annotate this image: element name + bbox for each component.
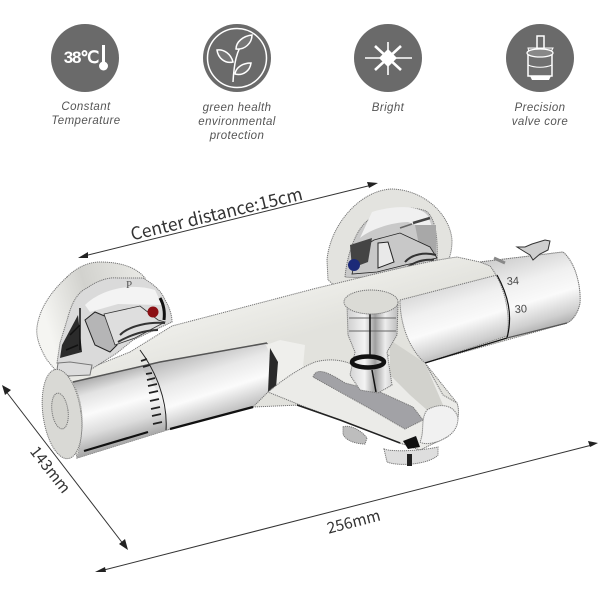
faucet <box>37 189 580 466</box>
diverter knob <box>344 290 398 393</box>
caption: valve core: valve core <box>512 116 568 128</box>
label: center distance: Center distance:15cm <box>128 181 305 246</box>
label: 256mm: 256mm <box>324 504 383 539</box>
thermostat housing right: 34 <box>506 275 519 288</box>
icon: bright star <box>354 24 422 92</box>
icon: valve core <box>506 24 574 92</box>
handle dome: left <box>57 278 172 376</box>
caption: constant temperature: Constant <box>61 101 111 113</box>
icon: green health leaf <box>203 24 271 92</box>
caption: constant temperature: Temperature <box>51 115 121 127</box>
caption: bright: Bright <box>372 102 405 114</box>
caption: green health: green health <box>203 102 271 114</box>
icon: constant temperature: 38℃ <box>64 48 99 67</box>
thermostat housing right: 30 <box>514 303 527 316</box>
back plate: left handle <box>37 262 145 378</box>
caption: green health: environmental <box>198 116 276 128</box>
handle dome: right <box>345 207 437 277</box>
arrow: width 256mm <box>95 441 598 572</box>
end cap of left thermostat <box>37 367 87 461</box>
handle dome: left: P <box>126 279 132 291</box>
main body silhouette <box>60 252 580 458</box>
aerator nut <box>343 426 438 466</box>
label: 143mm: 143mm <box>25 441 76 498</box>
back plate: right handle <box>327 189 452 290</box>
arrow: height 143mm <box>2 385 128 550</box>
icon: constant temperature <box>51 24 119 92</box>
caption: green health: protection <box>209 130 264 142</box>
thermostat housing right <box>400 240 580 363</box>
spout <box>268 340 458 450</box>
caption: valve core: Precision <box>515 102 565 114</box>
thermostat housing left <box>73 340 305 458</box>
arrow: center distance <box>78 182 378 258</box>
